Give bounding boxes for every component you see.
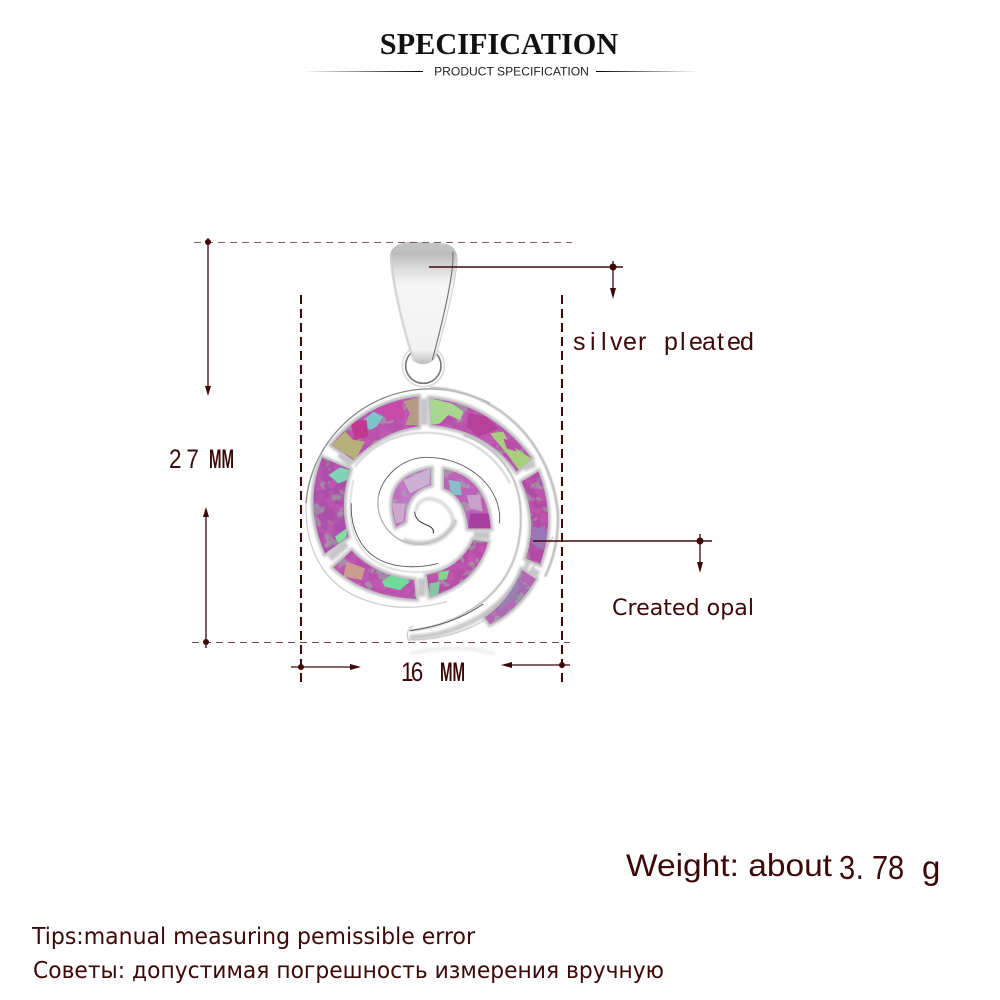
pendant	[303, 242, 563, 640]
tips text: Tips:manual measuring pemissible error	[31, 922, 475, 950]
weight text	[626, 847, 940, 886]
opal flecks	[328, 397, 548, 612]
soft halo around opal inlays	[313, 397, 548, 624]
pendant bail and ring	[390, 242, 457, 387]
opal colour fields	[310, 453, 553, 625]
width label	[401, 657, 465, 687]
width label: 16	[401, 658, 423, 687]
width dimension arrows	[291, 662, 570, 670]
pendant spiral body	[303, 388, 563, 640]
title: SPECIFICATION	[380, 27, 618, 61]
weight text: 3.78	[839, 849, 904, 886]
faint reflection under pendant	[410, 648, 495, 654]
weight text: g	[922, 849, 940, 886]
opal segments	[314, 396, 548, 624]
callout: created opal: Created opal	[612, 596, 754, 621]
spokes between inlays	[329, 398, 538, 597]
spiral dark lines	[351, 503, 438, 567]
callout: silver pleated: silver pleated	[573, 328, 754, 356]
outer rim shading	[306, 389, 490, 503]
height dimension arrows	[203, 238, 211, 648]
height label: MM	[209, 444, 234, 474]
tips text: Советы: допустимая погрешность измерения вручную	[33, 956, 664, 984]
subtitle: PRODUCT SPECIFICATION	[434, 64, 589, 78]
tail shading	[409, 523, 538, 637]
inner band	[355, 433, 510, 483]
height label	[169, 444, 234, 474]
width label: MM	[440, 657, 465, 687]
callout: created opal	[533, 534, 754, 621]
height label: 27	[169, 445, 199, 474]
title	[303, 27, 698, 78]
callout: silver pleated	[429, 261, 754, 356]
tips text	[31, 922, 664, 984]
dashed guide lines	[192, 242, 572, 682]
weight text: Weight: about	[626, 847, 832, 883]
